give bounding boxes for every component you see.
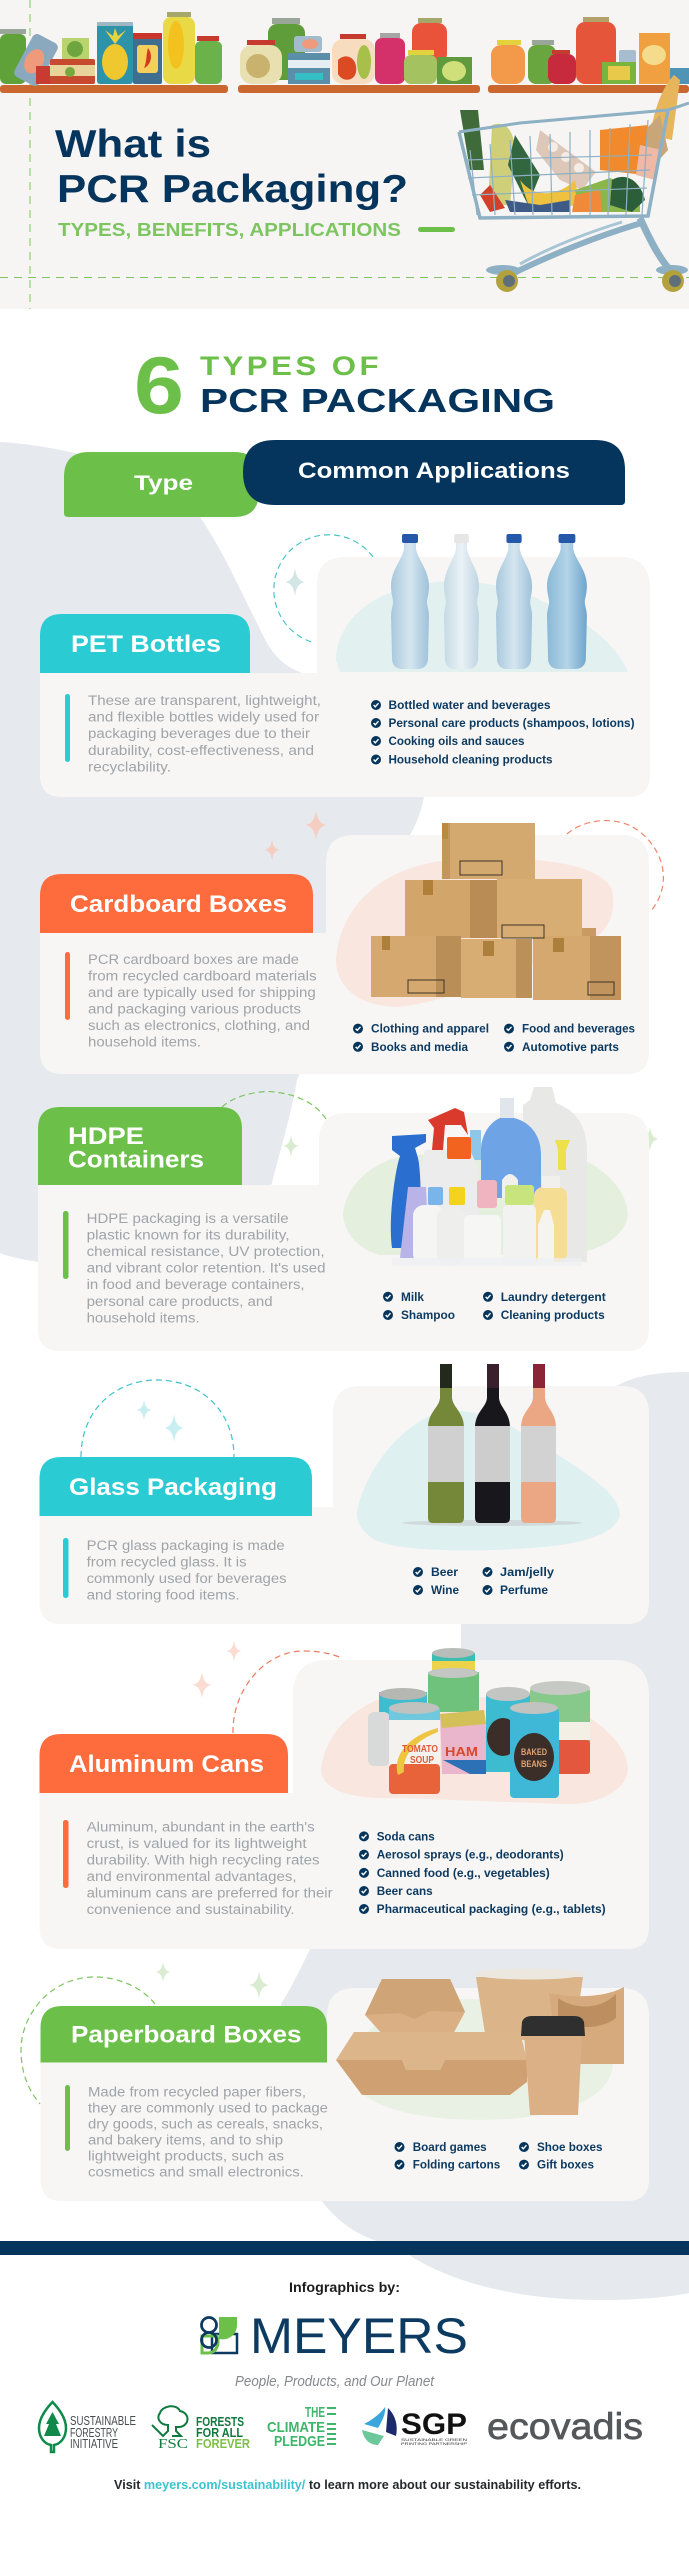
applications list — [359, 1829, 606, 1916]
description: Made from recycled paper fibers, — [88, 2084, 306, 2099]
applications list: Jam/jelly — [500, 1565, 554, 1579]
description: Aluminum, abundant in the earth's — [87, 1819, 315, 1834]
description — [63, 1538, 287, 1602]
applications list: Food and beverages — [522, 1022, 635, 1036]
section: Glass Packaging — [40, 1364, 649, 1624]
description: aluminum cans are preferred for their — [87, 1886, 333, 1901]
applications list — [394, 2140, 603, 2172]
sparkle icon large — [306, 810, 326, 840]
tab: HDPE — [68, 1123, 144, 1150]
section: Aluminum Cans — [40, 1640, 649, 1949]
column header: Type — [64, 452, 259, 517]
sparkle icon lower — [193, 1672, 211, 1698]
Meyers logo: MEYERS — [250, 2308, 468, 2364]
applications list: Clothing and apparel — [371, 1022, 489, 1036]
image: food cans: BEANS — [521, 1759, 547, 1769]
description: from recycled cardboard materials — [88, 968, 317, 984]
background blob left — [0, 442, 424, 1263]
description — [65, 693, 321, 774]
arc decoration — [233, 1651, 342, 1733]
arc decoration — [567, 821, 663, 911]
title: PCR Packaging? — [57, 168, 408, 211]
arc decoration — [274, 535, 373, 643]
tab: Aluminum Cans — [69, 1751, 264, 1778]
section: HDPE Containers — [38, 1087, 658, 1351]
image: water bottles — [336, 534, 628, 672]
logo: FSC Forests For All Forever: FORESTS — [196, 2414, 244, 2429]
logo: The Climate Pledge: THE — [305, 2404, 325, 2421]
applications list: Perfume — [500, 1583, 548, 1597]
logo: SGP: SGP — [401, 2408, 467, 2441]
section: Paperboard Boxes — [21, 1962, 649, 2201]
tab — [40, 1457, 312, 1516]
tab — [40, 1734, 288, 1793]
applications list: Wine — [431, 1583, 459, 1597]
applications list: Household cleaning products — [388, 752, 553, 766]
description: household items. — [87, 1310, 200, 1325]
image: glass bottles — [357, 1364, 620, 1550]
description: PCR cardboard boxes are made — [88, 952, 299, 967]
section: PET Bottles — [40, 534, 650, 797]
applications list: Cleaning products — [501, 1308, 605, 1322]
footer call to action: Visit meyers.com/sustainability/ to learn more about our sustainability efforts. — [114, 2478, 581, 2492]
image: food cans: TOMATO — [402, 1744, 438, 1755]
sparkle icon small — [265, 840, 279, 860]
logo: EcoVadis: ecovadis — [487, 2406, 643, 2447]
tab: Containers — [68, 1146, 204, 1174]
image: food cans: SOUP — [410, 1755, 434, 1766]
title — [55, 123, 408, 211]
logo: FSC Forests For All Forever: FOR ALL — [196, 2425, 243, 2440]
description: and bakery items, and to ship — [88, 2132, 283, 2147]
description: such as electronics, clothing, and — [88, 1018, 310, 1033]
logo: Sustainable Forestry Initiative: SUSTAINABLE — [70, 2414, 136, 2428]
sparkle icon large — [164, 1414, 184, 1442]
description: and vibrant color retention. It's used — [87, 1261, 326, 1276]
image: food cans: HAM — [445, 1744, 478, 1759]
logo: FSC Forests For All Forever: FOREVER — [196, 2436, 251, 2451]
tab — [40, 874, 313, 933]
sparkle icon small — [137, 1400, 151, 1420]
description: chemical resistance, UV protection, — [87, 1244, 325, 1259]
illustration: shopping cart — [459, 75, 689, 292]
description: lightweight products, such as — [88, 2148, 284, 2163]
logo: SGP — [362, 2407, 467, 2446]
description: packaging beverages due to their — [88, 726, 311, 741]
subtitle: TYPES, BENEFITS, APPLICATIONS — [58, 220, 401, 240]
description: These are transparent, lightweight, — [88, 693, 321, 708]
description: HDPE packaging is a versatile — [87, 1211, 289, 1226]
description: from recycled glass. It is — [87, 1554, 247, 1570]
description: personal care products, and — [87, 1294, 273, 1309]
logo: FSC Forests For All Forever — [152, 2406, 251, 2452]
background blob right — [281, 1372, 689, 2300]
applications list: Personal care products (shampoos, lotions) — [388, 716, 635, 730]
logo: The Climate Pledge: CLIMATE — [267, 2419, 325, 2436]
description: and storing food items. — [87, 1588, 240, 1602]
image: kraft paper packaging — [336, 1968, 624, 2120]
description: durability, cost-effectiveness, and — [88, 743, 314, 758]
section heading — [134, 341, 555, 431]
logo: FSC Forests For All Forever: FSC — [158, 2437, 188, 2452]
applications list — [413, 1565, 554, 1597]
arc decoration — [21, 1977, 155, 2104]
applications list: Automotive parts — [522, 1040, 619, 1054]
arc decoration — [222, 1092, 330, 1126]
description: commonly used for beverages — [87, 1571, 287, 1586]
applications list: Shoe boxes — [537, 2140, 603, 2154]
logo: Sustainable Forestry Initiative — [39, 2402, 136, 2452]
description: PCR glass packaging is made — [87, 1538, 285, 1553]
description: recyclability. — [88, 759, 171, 774]
panel — [38, 1113, 649, 1351]
panel — [40, 557, 650, 797]
footer band — [0, 2241, 689, 2255]
applications list: Cooking oils and sauces — [388, 734, 525, 748]
section heading: TYPES OF — [200, 351, 382, 381]
section: Cardboard Boxes — [40, 810, 663, 1074]
sparkle icon small — [156, 1962, 170, 1982]
applications list: Milk — [401, 1290, 424, 1304]
applications list: Aerosol sprays (e.g., deodorants) — [377, 1848, 564, 1862]
applications list: Beer — [431, 1565, 458, 1579]
description: household items. — [88, 1034, 201, 1050]
section heading: 6 — [134, 341, 184, 431]
tab: Paperboard Boxes — [71, 2022, 302, 2048]
sparkle icon left — [283, 1135, 299, 1157]
description: crust, is valued for its lightweight — [87, 1836, 307, 1851]
image: plastic containers — [343, 1087, 628, 1266]
shelf 1 with jars — [0, 12, 228, 93]
tagline: People, Products, and Our Planet — [235, 2374, 435, 2390]
description — [63, 1211, 326, 1325]
column header: Common Applications — [243, 440, 625, 505]
image: cardboard boxes — [336, 823, 621, 1007]
image: food cans: BAKED — [521, 1747, 547, 1757]
description: and environmental advantages, — [87, 1869, 297, 1884]
tab: PET Bottles — [71, 631, 221, 658]
section heading: PCR PACKAGING — [200, 382, 555, 419]
shelf 2 with jars — [238, 18, 480, 93]
logo: SGP: PRINTING PARTNERSHIP — [401, 2441, 467, 2446]
applications list: Canned food (e.g., vegetables) — [377, 1866, 550, 1880]
panel — [40, 1386, 649, 1624]
applications list: Books and media — [371, 1040, 468, 1054]
shelf 3 with jars — [488, 17, 689, 93]
description: plastic known for its durability, — [87, 1228, 290, 1242]
tab — [40, 614, 250, 673]
description: and flexible bottles widely used for — [88, 710, 320, 725]
applications list: Soda cans — [377, 1829, 435, 1843]
description: and packaging various products — [88, 1002, 301, 1016]
icon: Meyers mark — [202, 2317, 237, 2353]
decorative dashed guides — [0, 0, 689, 309]
description: and are typically used for shipping — [88, 985, 316, 1000]
logo: Sustainable Forestry Initiative: FORESTRY — [70, 2426, 118, 2440]
panel — [40, 1988, 649, 2201]
description: in food and beverage containers, — [87, 1277, 305, 1292]
applications list: Pharmaceutical packaging (e.g., tablets) — [377, 1902, 606, 1916]
image: food cans — [321, 1648, 628, 1804]
applications list: Board games — [413, 2140, 487, 2154]
applications list: Folding cartons — [413, 2158, 501, 2172]
applications list — [383, 1290, 606, 1322]
logo: SGP: SUSTAINABLE GREEN — [401, 2437, 467, 2442]
arc decoration — [81, 1380, 234, 1457]
applications list: Gift boxes — [537, 2158, 594, 2172]
tab — [40, 2006, 327, 2062]
footer credit: Infographics by: — [289, 2279, 400, 2295]
logo: The Climate Pledge: PLEDGE — [274, 2433, 325, 2450]
panel — [40, 1660, 649, 1949]
description: they are commonly used to package — [88, 2100, 328, 2115]
sparkle icon large — [249, 1971, 269, 1999]
description — [65, 2084, 328, 2179]
logo: Sustainable Forestry Initiative: INITIATIVE — [70, 2437, 118, 2451]
description: cosmetics and small electronics. — [88, 2164, 304, 2179]
tab: Glass Packaging — [69, 1474, 277, 1501]
header background — [0, 0, 689, 309]
tab: Cardboard Boxes — [70, 891, 287, 918]
applications list — [371, 698, 635, 766]
description: dry goods, such as cereals, snacks, — [88, 2116, 323, 2131]
tab — [38, 1107, 242, 1185]
column header: Type: Type — [134, 472, 193, 495]
applications list: Laundry detergent — [501, 1290, 606, 1304]
description — [63, 1819, 333, 1917]
description — [65, 952, 317, 1050]
description: durability. With high recycling rates — [87, 1852, 320, 1868]
applications list: Beer cans — [377, 1884, 433, 1898]
sparkle icon — [285, 568, 305, 596]
column header: Common Applications: Common Applications — [298, 458, 570, 483]
description: convenience and sustainability. — [87, 1902, 295, 1917]
logo: The Climate Pledge — [267, 2404, 336, 2450]
title: What is — [55, 123, 211, 166]
sparkle icon right — [642, 1127, 658, 1151]
sparkle icon top — [227, 1640, 241, 1662]
applications list: Bottled water and beverages — [388, 698, 551, 712]
applications list: Shampoo — [401, 1308, 455, 1322]
panel — [40, 835, 649, 1074]
applications list — [353, 1022, 635, 1054]
